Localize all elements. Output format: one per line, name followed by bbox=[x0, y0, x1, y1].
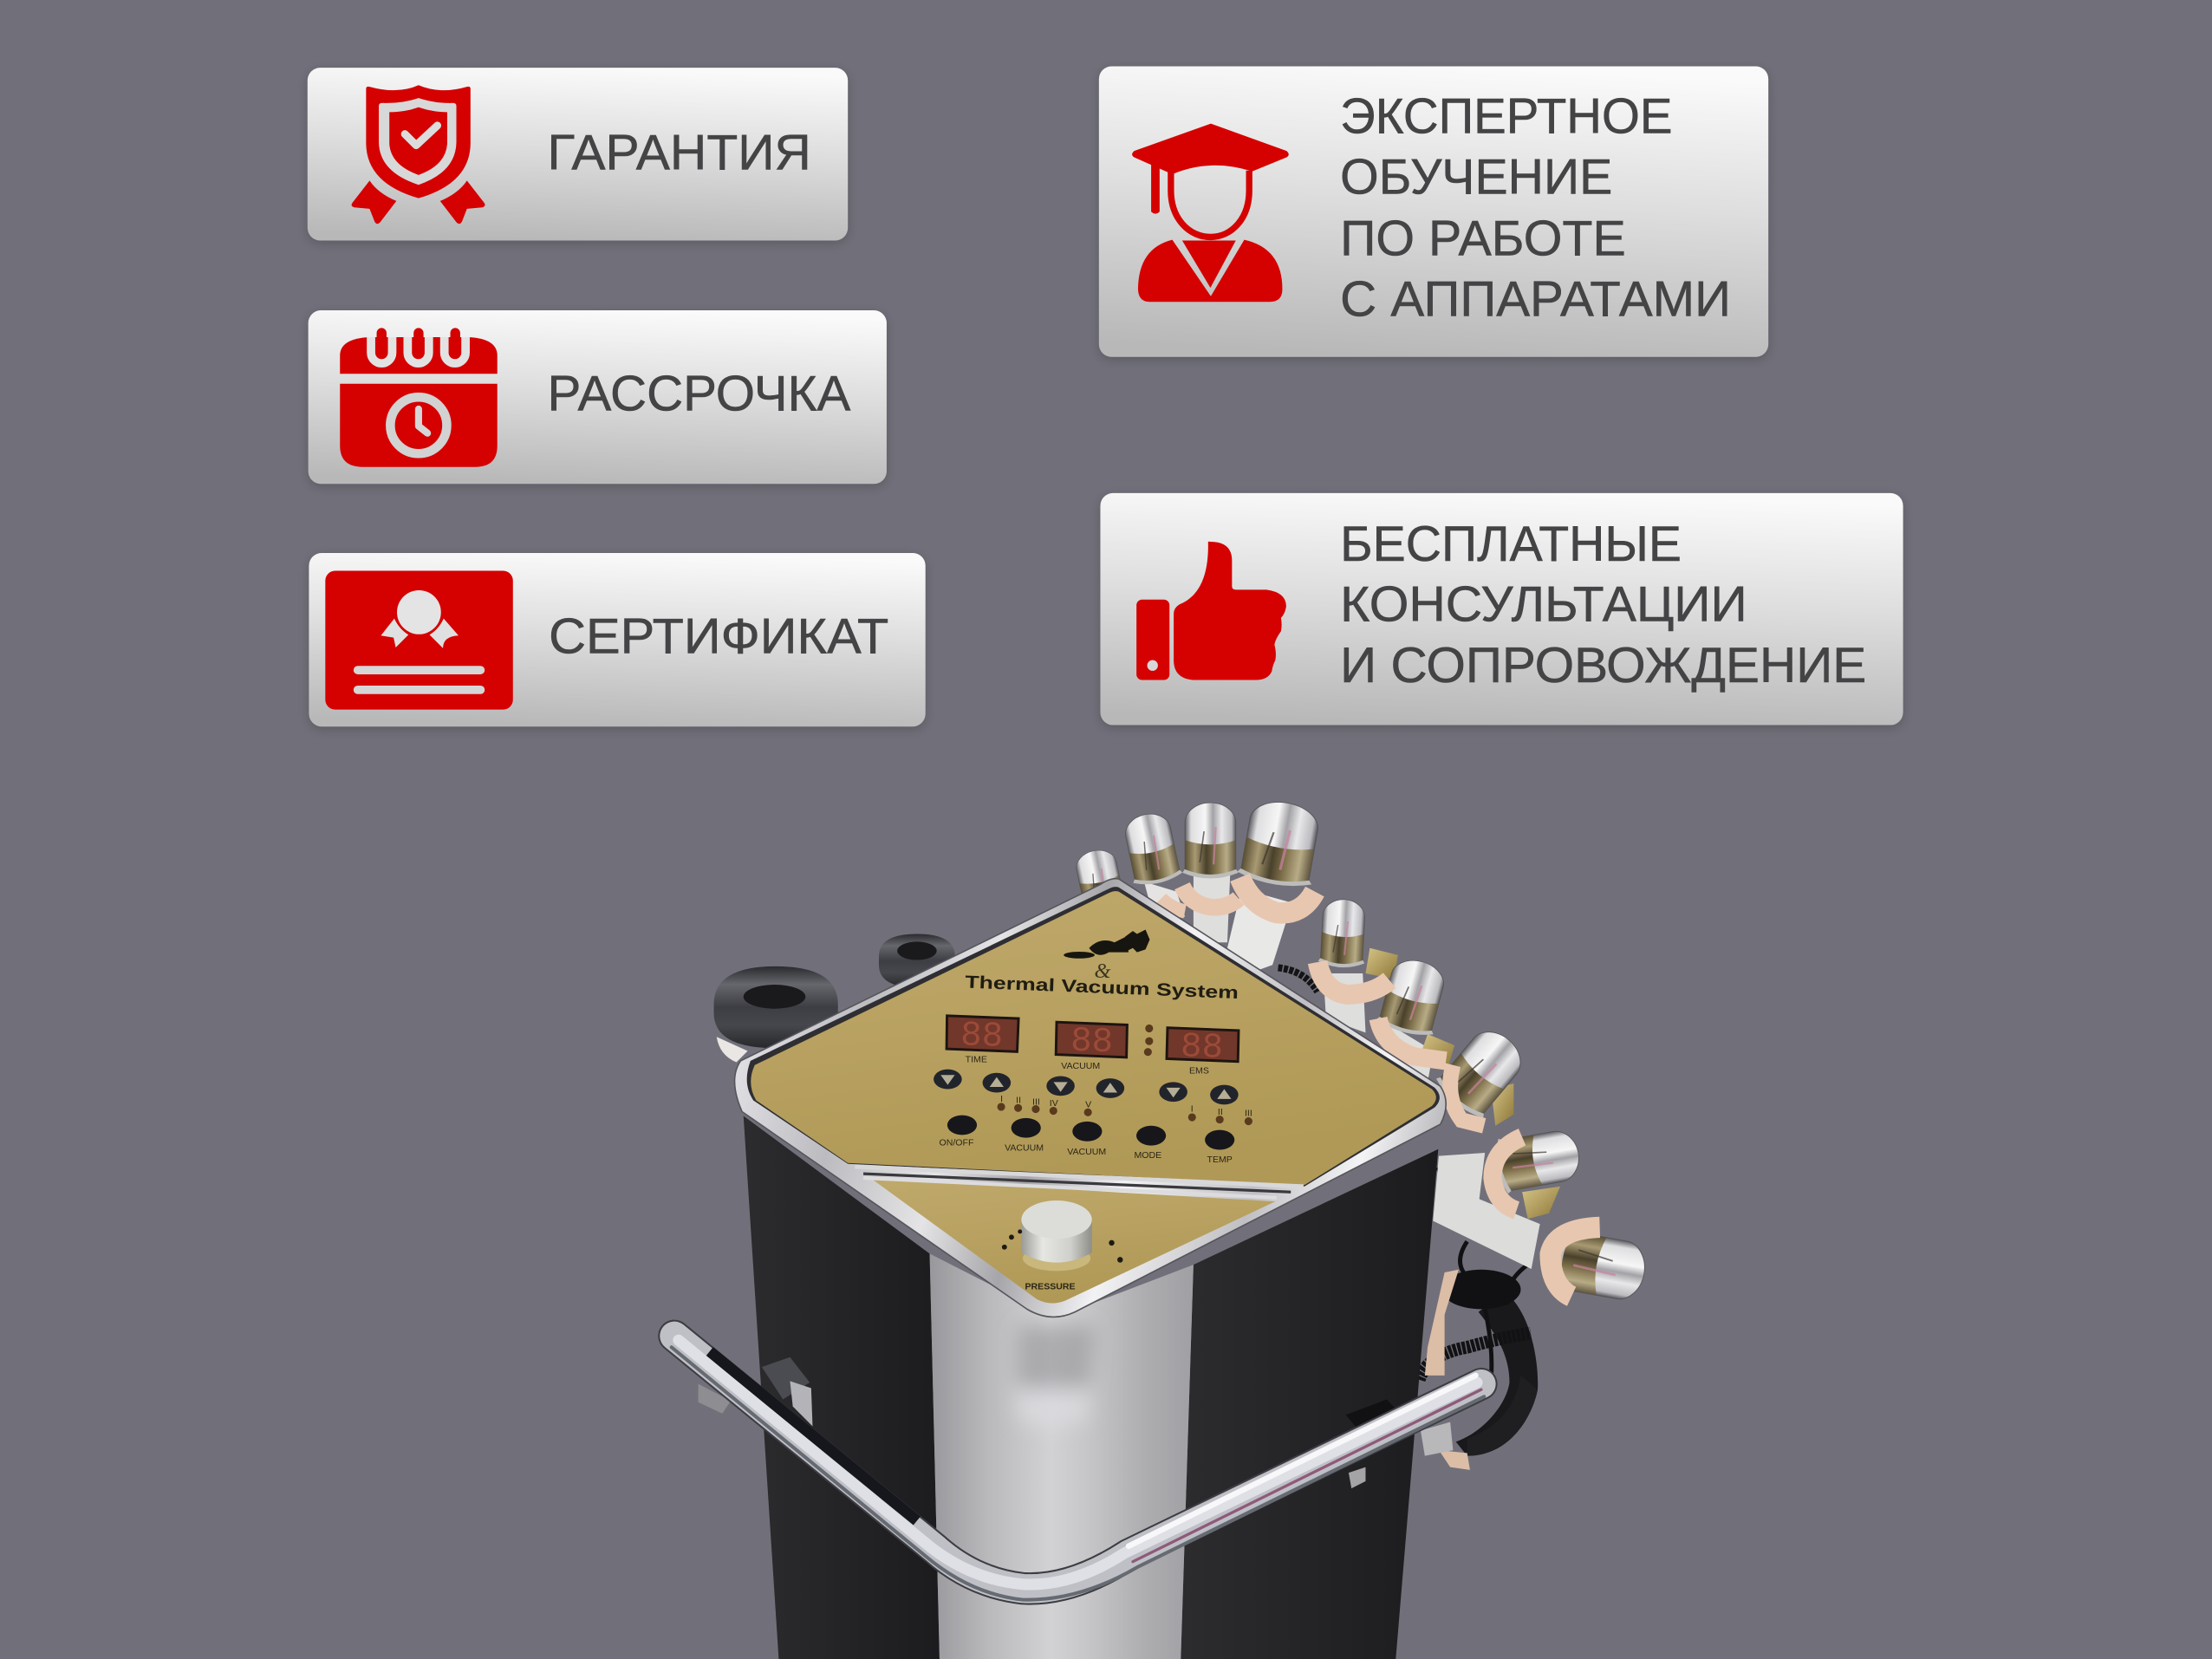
panel labels: IV bbox=[1050, 1098, 1058, 1109]
text: бесплатные консультации и сопровождение: И СОПРОВОЖДЕНИЕ bbox=[1340, 638, 1866, 693]
display digits: 88 bbox=[960, 1016, 1004, 1057]
chrome frame bbox=[735, 879, 1446, 1317]
chrome handle bar bbox=[672, 1336, 1484, 1600]
panel title: Thermal Vacuum System bbox=[965, 973, 1239, 1003]
text: бесплатные консультации и сопровождение bbox=[1340, 517, 1866, 693]
round buttons bbox=[947, 1116, 1234, 1149]
chrome applicator tips bbox=[1072, 797, 1649, 1304]
chrome divider bbox=[855, 1167, 1304, 1198]
panel labels: PRESSURE bbox=[1025, 1282, 1076, 1292]
panel labels bbox=[940, 1055, 1252, 1292]
gold lower face bbox=[870, 1178, 1275, 1303]
panel labels: TEMP bbox=[1207, 1155, 1233, 1165]
panel labels: VACUUM bbox=[1061, 1061, 1100, 1071]
card: бесплатные консультации bbox=[1100, 493, 1903, 725]
panel labels: MODE bbox=[1134, 1150, 1161, 1161]
control panel bbox=[735, 879, 1446, 1317]
displays bbox=[947, 1016, 1239, 1062]
card: рассрочка bbox=[309, 310, 887, 484]
column: dark right panel bbox=[1181, 1149, 1438, 1659]
cables and black holder bbox=[1267, 903, 1538, 1470]
text: экспертное обучение по работе с аппаратами: С АППАРАТАМИ bbox=[1340, 272, 1731, 328]
display digits: 88 bbox=[1070, 1022, 1114, 1063]
icon: thumbs up bbox=[1136, 542, 1286, 680]
device: thermal vacuum machine bbox=[672, 797, 1649, 1659]
dark inner rim bbox=[747, 887, 1440, 1187]
display digits: 88 bbox=[1180, 1027, 1224, 1069]
panel labels: ON/OFF bbox=[940, 1138, 974, 1148]
label: рассрочка: РАССРОЧКА bbox=[547, 367, 851, 422]
rubber rings bbox=[714, 934, 955, 1063]
icon: certificate bbox=[325, 571, 513, 710]
card: сертификат bbox=[309, 553, 926, 726]
panel labels: VACUUM bbox=[1005, 1142, 1044, 1153]
text: бесплатные консультации и сопровождение: КОНСУЛЬТАЦИИ bbox=[1340, 577, 1747, 633]
ampersand: & bbox=[1094, 960, 1110, 983]
gold applicator blocks bbox=[1365, 948, 1560, 1219]
gold upper face bbox=[751, 891, 1436, 1185]
panel labels: V bbox=[1085, 1100, 1091, 1110]
panel labels: II bbox=[1016, 1096, 1021, 1106]
card: гарантия bbox=[308, 68, 848, 240]
icon: shield with ribbons bbox=[352, 85, 485, 224]
panel labels: TIME bbox=[966, 1055, 987, 1065]
white applicator handles bbox=[1144, 875, 1540, 1269]
indicator leds bbox=[998, 1025, 1252, 1125]
panel labels: III bbox=[1032, 1096, 1040, 1107]
icon: calendar with clock bbox=[340, 333, 498, 467]
label: гарантия: ГАРАНТИЯ bbox=[547, 125, 811, 180]
velcro straps bbox=[1161, 877, 1600, 1297]
handle brackets bbox=[699, 1357, 1453, 1488]
logo mark bbox=[1064, 930, 1149, 959]
panel labels: III bbox=[1245, 1108, 1252, 1118]
reflection on steel bbox=[1016, 1326, 1095, 1426]
column: dark left panel bbox=[744, 1116, 940, 1659]
text: экспертное обучение по работе с аппаратами: ПО РАБОТЕ bbox=[1340, 211, 1626, 267]
text: экспертное обучение по работе с аппаратами bbox=[1340, 88, 1731, 328]
panel labels: I bbox=[1191, 1104, 1194, 1115]
panel labels: VACUUM bbox=[1067, 1147, 1106, 1157]
panel labels: I bbox=[1000, 1094, 1003, 1104]
icon: graduate bbox=[1132, 124, 1289, 302]
pressure knob bbox=[1002, 1200, 1123, 1271]
card: экспертное обучение bbox=[1099, 66, 1768, 357]
arrow buttons bbox=[934, 1070, 1239, 1104]
text: экспертное обучение по работе с аппаратами: ЭКСПЕРТНОЕ bbox=[1340, 88, 1672, 144]
column: brushed steel centre bbox=[930, 1253, 1194, 1659]
text: экспертное обучение по работе с аппаратами: ОБУЧЕНИЕ bbox=[1340, 149, 1612, 205]
panel labels: II bbox=[1218, 1107, 1223, 1117]
label: сертификат: СЕРТИФИКАТ bbox=[549, 609, 888, 665]
text: бесплатные консультации и сопровождение: БЕСПЛАТНЫЕ bbox=[1340, 517, 1682, 572]
display digits bbox=[960, 1016, 1224, 1069]
panel labels: EMS bbox=[1189, 1066, 1209, 1077]
